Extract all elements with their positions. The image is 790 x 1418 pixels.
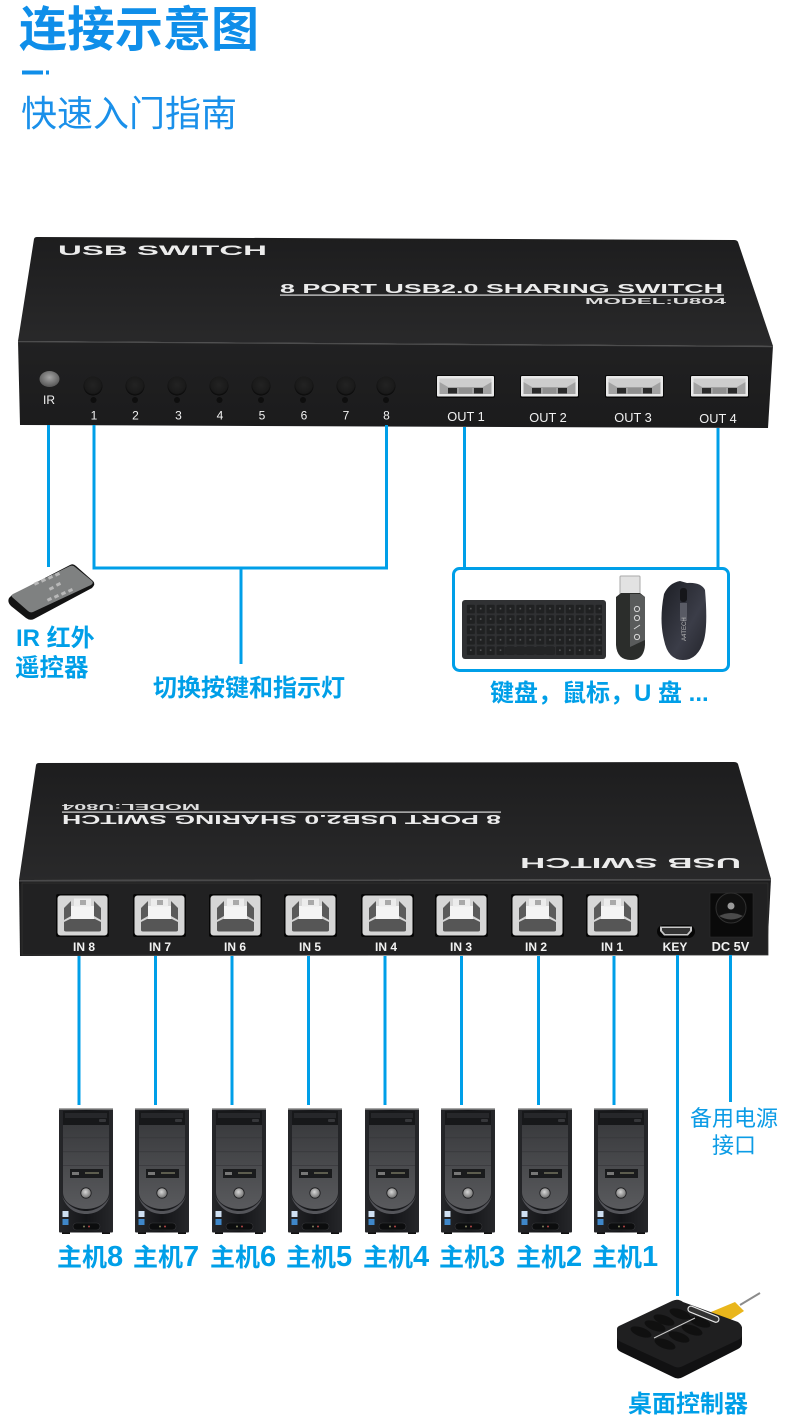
switch buttons 1-8 bbox=[84, 376, 396, 422]
USB-A output ports: OUT 3 bbox=[614, 410, 652, 425]
USB-A output ports: OUT 1 bbox=[447, 409, 485, 424]
label: IR remote bbox=[15, 625, 95, 682]
connector: DC line bbox=[729, 955, 732, 1102]
connector: buttons bracket bbox=[94, 425, 386, 664]
subtitle: 快速入门指南 bbox=[21, 85, 237, 137]
DC power jack bbox=[710, 893, 753, 954]
icon: host 5 bbox=[288, 1108, 342, 1234]
rear top face bbox=[19, 762, 771, 880]
print: product name: 8 PORT USB2.0 SHARING SWITCH bbox=[280, 282, 723, 296]
icon: host 6 bbox=[212, 1108, 266, 1234]
DC power jack: DC 5V bbox=[712, 939, 750, 954]
print: model: MODEL:U804 bbox=[585, 296, 727, 306]
device: rear view with ports bbox=[19, 762, 771, 956]
USB-B input ports: IN 5 bbox=[299, 940, 321, 954]
connector: IR line bbox=[47, 425, 50, 567]
IR sensor: IR bbox=[43, 393, 55, 407]
USB-B input ports bbox=[56, 894, 639, 954]
icon: host 8 bbox=[59, 1108, 113, 1234]
connector: KEY line bbox=[676, 955, 679, 1296]
switch buttons 1-8: 7 bbox=[343, 408, 350, 422]
switch buttons 1-8: 1 bbox=[91, 408, 98, 422]
switch buttons 1-8: 2 bbox=[132, 408, 139, 422]
icon: desktop controller bbox=[617, 1293, 760, 1378]
device top face bbox=[18, 237, 773, 346]
USB-B input ports: IN 8 bbox=[73, 940, 95, 954]
print: USB SWITCH: USB SWITCH bbox=[58, 243, 267, 258]
label: peripherals: 键盘，鼠标，U 盘 ... bbox=[490, 680, 709, 707]
print: model (upside down): MODEL:U804 bbox=[61, 802, 200, 812]
print: product name (upside down): 8 PORT USB2.0 SHARING SWITCH bbox=[62, 812, 501, 827]
connector: input lines to hosts bbox=[79, 956, 614, 1105]
icon: host 1 bbox=[594, 1108, 648, 1234]
USB-B input ports: IN 3 bbox=[450, 940, 472, 954]
USB-B input ports: IN 1 bbox=[601, 940, 623, 954]
USB-B input ports: IN 2 bbox=[525, 940, 547, 954]
label: switch buttons: 切换按键和指示灯 bbox=[153, 675, 345, 702]
IR sensor bbox=[40, 371, 60, 407]
switch buttons 1-8: 5 bbox=[259, 408, 266, 422]
icon: mouse bbox=[662, 581, 706, 660]
host labels bbox=[57, 1241, 658, 1273]
host labels: 主机1 bbox=[592, 1241, 658, 1273]
connector: output lines bbox=[464, 427, 718, 568]
USB-B input ports: IN 4 bbox=[375, 940, 397, 954]
icon: USB drive bbox=[616, 576, 645, 660]
switch buttons 1-8: 4 bbox=[217, 408, 224, 422]
label: backup power: 备用电源 bbox=[690, 1101, 778, 1133]
micro USB KEY port bbox=[657, 925, 695, 954]
icon: mouse: A4TECH bbox=[682, 617, 688, 641]
label: IR remote: IR 红外 bbox=[16, 625, 95, 652]
rear face bbox=[19, 879, 771, 956]
cable bbox=[740, 1293, 760, 1305]
host labels: 主机8 bbox=[57, 1241, 123, 1273]
host labels: 主机5 bbox=[286, 1241, 352, 1273]
USB-A output ports: OUT 2 bbox=[529, 410, 567, 425]
label: backup power: 接口 bbox=[712, 1128, 756, 1160]
icon: host 4 bbox=[365, 1108, 419, 1234]
micro USB KEY port: KEY bbox=[663, 940, 687, 954]
USB-B input ports: IN 6 bbox=[224, 940, 246, 954]
switch buttons 1-8: 6 bbox=[301, 408, 308, 422]
icon: host 2 bbox=[518, 1108, 572, 1234]
host labels: 主机7 bbox=[133, 1241, 199, 1273]
label: backup power bbox=[690, 1101, 778, 1160]
brand plate bbox=[687, 1305, 720, 1323]
icon: host 7 bbox=[135, 1108, 189, 1234]
host labels: 主机3 bbox=[439, 1241, 505, 1273]
host labels: 主机4 bbox=[363, 1241, 429, 1273]
accent bar bbox=[22, 70, 49, 74]
host labels: 主机6 bbox=[210, 1241, 276, 1273]
USB-A output ports bbox=[436, 375, 749, 426]
USB-B input ports: IN 7 bbox=[149, 940, 171, 954]
USB-A output ports: OUT 4 bbox=[699, 411, 737, 426]
print: USB SWITCH (upside down): USB SWITCH bbox=[520, 854, 741, 871]
host computers bbox=[59, 1108, 648, 1234]
switch buttons 1-8: 8 bbox=[383, 408, 390, 422]
controller body bbox=[617, 1327, 742, 1378]
peripherals box bbox=[454, 568, 728, 670]
icon: IR remote bbox=[8, 564, 94, 620]
icon: keyboard bbox=[462, 600, 606, 659]
switch buttons 1-8: 3 bbox=[175, 408, 182, 422]
device: front view with buttons bbox=[18, 237, 773, 428]
label: desktop controller: 桌面控制器 bbox=[628, 1391, 748, 1418]
device front face bbox=[18, 341, 773, 428]
label: IR remote: 遥控器 bbox=[15, 654, 89, 682]
icon: host 3 bbox=[441, 1108, 495, 1234]
host labels: 主机2 bbox=[516, 1241, 582, 1273]
